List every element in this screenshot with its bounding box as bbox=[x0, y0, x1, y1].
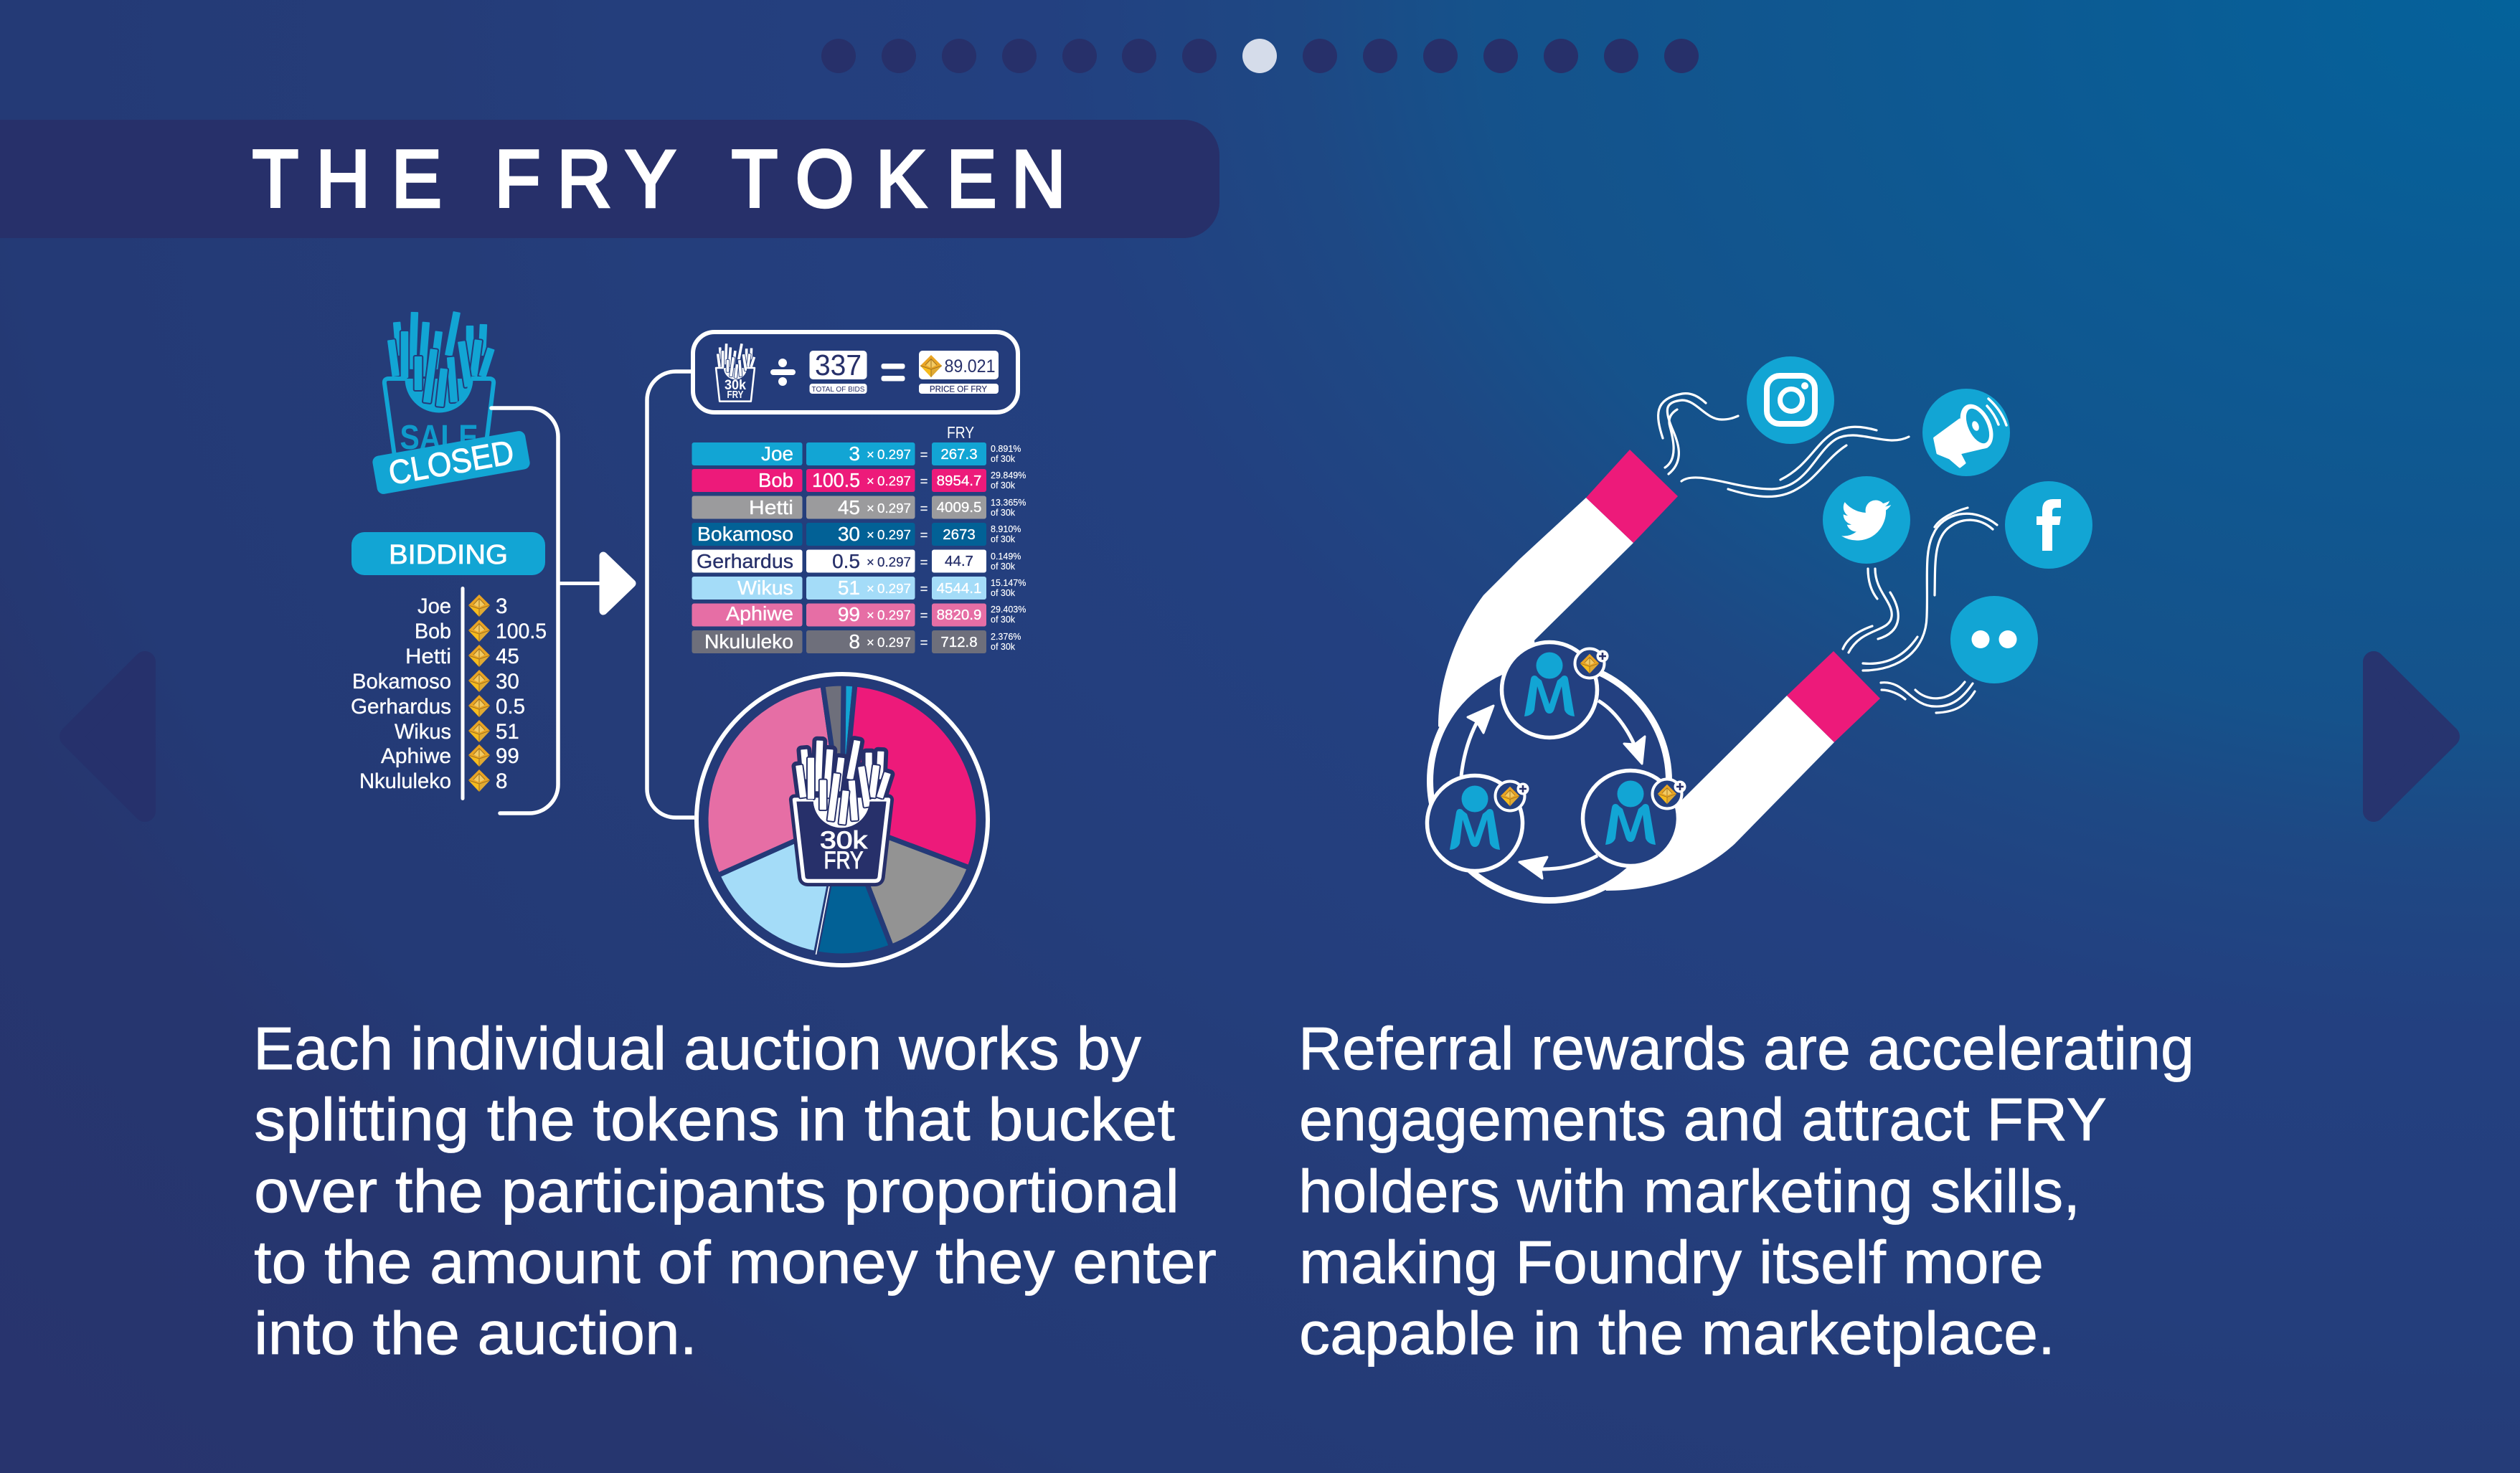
row: Bob: 100.5 bbox=[812, 469, 860, 491]
waves: megaphone bbox=[1681, 427, 1909, 497]
text: referral description: making Foundry itself more bbox=[1299, 1228, 2044, 1296]
person: left bbox=[1427, 776, 1522, 871]
referral ring bbox=[1430, 661, 1669, 901]
row: Bokamoso: 30 bbox=[838, 523, 860, 545]
row: Hetti: = bbox=[920, 501, 928, 516]
reward badge: left bbox=[1495, 782, 1529, 810]
row: Bokamoso: = bbox=[920, 527, 928, 542]
row: Nkululeko: = bbox=[920, 635, 928, 650]
row: Nkululeko: of 30k bbox=[991, 642, 1016, 652]
icon: instagram bbox=[1747, 356, 1834, 444]
row: Joe: 0.297 bbox=[877, 447, 911, 462]
row: Bob: 29.849% bbox=[991, 470, 1026, 480]
price of fry bbox=[919, 351, 999, 394]
pagination dots bbox=[821, 39, 1699, 73]
row: Bokamoso: 2673 bbox=[943, 526, 976, 543]
results table bbox=[692, 442, 1026, 653]
waves: flickr bbox=[1881, 682, 1975, 713]
row: Bob: 0.297 bbox=[877, 473, 911, 488]
row: Hetti: Hetti bbox=[749, 496, 793, 518]
row: Wikus: 0.297 bbox=[877, 581, 911, 596]
bidding list: Joe bbox=[417, 595, 451, 618]
reward badge: top bbox=[1575, 648, 1608, 678]
divide sign bbox=[770, 359, 796, 386]
icon: central fries 30k FRY: FRY bbox=[824, 847, 864, 874]
row: Nkululeko bbox=[692, 630, 1021, 653]
total of bids: TOTAL OF BIDS bbox=[812, 385, 865, 394]
row: Aphiwe: 99 bbox=[838, 603, 860, 625]
row: Hetti bbox=[692, 496, 1026, 519]
bidding list: Hetti bbox=[405, 645, 451, 668]
magnet bbox=[1438, 450, 1880, 891]
waves: instagram bbox=[1658, 394, 1738, 474]
row: Bokamoso: 0.297 bbox=[877, 527, 911, 542]
price of fry: PRICE OF FRY bbox=[930, 386, 987, 394]
row: Bokamoso: of 30k bbox=[991, 534, 1016, 544]
reward badge: right bbox=[1653, 779, 1686, 809]
row: Hetti: of 30k bbox=[991, 508, 1016, 518]
row: Joe: of 30k bbox=[991, 454, 1016, 464]
text: auction description bbox=[253, 1015, 1217, 1367]
row: Gerhardus: 44.7 bbox=[945, 553, 973, 569]
text: auction description: Each individual auction works by bbox=[253, 1015, 1141, 1082]
bidding list: Wikus bbox=[395, 720, 451, 744]
row: Wikus bbox=[692, 577, 1026, 600]
bidding list: 0.5 bbox=[496, 695, 525, 719]
text: auction description: into the auction. bbox=[254, 1299, 697, 1367]
text: auction description: splitting the tokens in that bucket bbox=[254, 1086, 1175, 1153]
icon: small fries 30k: 30k bbox=[725, 378, 746, 393]
row: Aphiwe: Aphiwe bbox=[726, 602, 793, 625]
text: auction description: over the participants proportional bbox=[254, 1157, 1179, 1225]
total of bids: 337 bbox=[815, 349, 862, 382]
row: Aphiwe: of 30k bbox=[991, 615, 1016, 625]
bidding list: Aphiwe bbox=[381, 744, 451, 768]
text: referral description bbox=[1298, 1015, 2194, 1367]
bidding list: Gerhardus bbox=[351, 695, 451, 719]
row: Gerhardus: = bbox=[920, 554, 928, 569]
row: Hetti: 13.365% bbox=[991, 498, 1026, 508]
bracket to equation and pie bbox=[647, 371, 694, 818]
row: Hetti: 4009.5 bbox=[937, 499, 981, 516]
row: Bob: Bob bbox=[758, 469, 793, 491]
bidding list: 3 bbox=[496, 595, 507, 618]
row: Wikus: Wikus bbox=[737, 577, 793, 599]
title banner bbox=[0, 120, 1219, 238]
text: referral description: Referral rewards are accelerating bbox=[1298, 1015, 2194, 1082]
row: Bokamoso: Bokamoso bbox=[697, 523, 793, 545]
equation panel bbox=[693, 332, 1018, 412]
row: Bob: × bbox=[867, 473, 874, 488]
row: Gerhardus: 0.5 bbox=[832, 550, 860, 572]
row: Joe: × bbox=[867, 447, 874, 462]
row: Joe: = bbox=[920, 447, 928, 462]
bidding list bbox=[351, 587, 547, 800]
icon: central fries 30k FRY bbox=[794, 739, 892, 881]
row: Wikus: of 30k bbox=[991, 588, 1016, 598]
title: THE FRY TOKEN bbox=[253, 135, 1066, 224]
row: Nkululeko: 8 bbox=[849, 630, 860, 653]
row: Bob: of 30k bbox=[991, 480, 1016, 491]
left navigation arrow bbox=[70, 662, 145, 811]
row: Gerhardus: of 30k bbox=[991, 562, 1016, 572]
bidding list: 51 bbox=[496, 720, 519, 744]
row: Joe: 0.891% bbox=[991, 444, 1021, 454]
row: Hetti: × bbox=[867, 501, 874, 516]
row: Bob bbox=[692, 469, 1026, 492]
row: Bokamoso: × bbox=[867, 527, 874, 542]
row: Nkululeko: × bbox=[867, 635, 874, 650]
sale closed fries icon bbox=[372, 311, 531, 495]
person: right bbox=[1582, 770, 1679, 866]
bidding heading bbox=[351, 532, 545, 575]
row: Aphiwe bbox=[692, 602, 1026, 627]
text: referral description: engagements and attract FRY bbox=[1299, 1086, 2107, 1153]
row: Gerhardus: Gerhardus bbox=[697, 550, 793, 572]
icon: megaphone bbox=[1922, 389, 2010, 476]
sale closed fries icon: SALE bbox=[400, 419, 478, 457]
row: Gerhardus bbox=[692, 549, 1021, 572]
row: Bokamoso: 8.910% bbox=[991, 524, 1021, 534]
row: Hetti: 0.297 bbox=[877, 501, 911, 516]
pie chart bbox=[697, 674, 988, 965]
price of fry: 89.021 bbox=[944, 356, 996, 376]
row: Joe: 3 bbox=[849, 442, 860, 465]
bidding list: Bokamoso bbox=[352, 670, 451, 693]
row: Gerhardus: 0.149% bbox=[991, 551, 1021, 562]
row: Bob: 8954.7 bbox=[937, 473, 981, 489]
text: auction description: to the amount of money they enter bbox=[254, 1228, 1217, 1296]
row: Gerhardus: × bbox=[867, 554, 874, 569]
magnet pole left bbox=[1586, 450, 1678, 543]
bidding heading: BIDDING bbox=[389, 540, 508, 570]
row: Aphiwe: 29.403% bbox=[991, 605, 1026, 615]
bidding list: 99 bbox=[496, 744, 519, 768]
right navigation arrow bbox=[2374, 662, 2449, 811]
row: Aphiwe: = bbox=[920, 607, 928, 622]
bidding list: Nkululeko bbox=[359, 769, 451, 793]
row: Wikus: = bbox=[920, 581, 928, 596]
row: Aphiwe: 0.297 bbox=[877, 607, 911, 622]
row: Gerhardus: 0.297 bbox=[877, 554, 911, 569]
bidding list: 30 bbox=[496, 670, 519, 693]
row: Hetti: 45 bbox=[838, 496, 860, 518]
text: referral description: capable in the marketplace. bbox=[1299, 1299, 2055, 1367]
icon: central fries 30k FRY: 30k bbox=[820, 827, 868, 854]
row: Aphiwe: 8820.9 bbox=[937, 607, 981, 623]
bidding list: 8 bbox=[496, 769, 507, 793]
equals sign bbox=[881, 364, 905, 382]
row: Wikus: 15.147% bbox=[991, 578, 1026, 588]
row: Nkululeko: Nkululeko bbox=[704, 630, 793, 653]
total of bids bbox=[809, 349, 867, 394]
row: Aphiwe: × bbox=[867, 607, 874, 622]
row: Bob: = bbox=[920, 473, 928, 488]
arrow to results bbox=[558, 556, 632, 611]
icon: twitter bbox=[1823, 476, 1910, 564]
row: Nkululeko: 2.376% bbox=[991, 632, 1021, 642]
row: Wikus: 4544.1 bbox=[937, 580, 981, 597]
waves: twitter bbox=[1843, 569, 1898, 653]
icon: flickr dots bbox=[1950, 596, 2038, 683]
closed label: CLOSED bbox=[386, 432, 516, 492]
bracket from bidding to arrow bbox=[491, 408, 558, 813]
magnet pole right bbox=[1787, 651, 1880, 742]
icon: small fries 30k: FRY bbox=[727, 389, 744, 401]
row: Joe bbox=[692, 442, 1021, 465]
icon: facebook bbox=[2005, 481, 2092, 569]
bidding list: Bob bbox=[415, 620, 451, 643]
row: Joe: Joe bbox=[761, 442, 793, 465]
row: Nkululeko: 712.8 bbox=[940, 634, 978, 650]
FRY column heading: FRY bbox=[947, 423, 974, 442]
icon: small fries 30k bbox=[716, 343, 756, 402]
bidding list: 100.5 bbox=[496, 620, 547, 643]
row: Joe: 267.3 bbox=[940, 446, 978, 463]
row: Wikus: × bbox=[867, 581, 874, 596]
row: Bokamoso bbox=[692, 523, 1021, 546]
row: Nkululeko: 0.297 bbox=[877, 635, 911, 650]
waves: facebook bbox=[1863, 508, 1997, 671]
text: referral description: holders with marketing skills, bbox=[1298, 1157, 2080, 1225]
row: Wikus: 51 bbox=[838, 577, 860, 599]
person: top bbox=[1502, 643, 1597, 737]
bidding list: 45 bbox=[496, 645, 519, 668]
referral arrows bbox=[1461, 701, 1645, 878]
